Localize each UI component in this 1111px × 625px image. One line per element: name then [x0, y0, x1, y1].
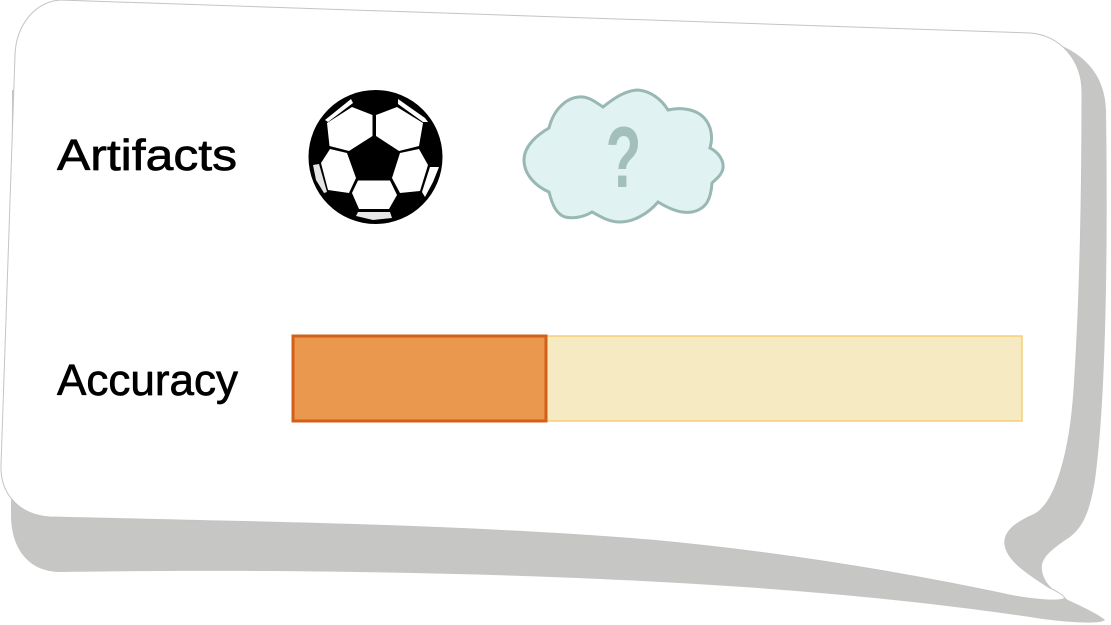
- label: Accuracy: Accuracy: [57, 356, 238, 405]
- icon: thought cloud with question mark: [524, 90, 723, 222]
- icon: soccer ball: [308, 90, 442, 224]
- bar fill: [293, 336, 546, 421]
- accuracy bar: [293, 336, 1022, 421]
- label: Artifacts: Artifacts: [57, 131, 237, 180]
- question mark: ?: [606, 109, 641, 206]
- bar track: [293, 336, 1022, 421]
